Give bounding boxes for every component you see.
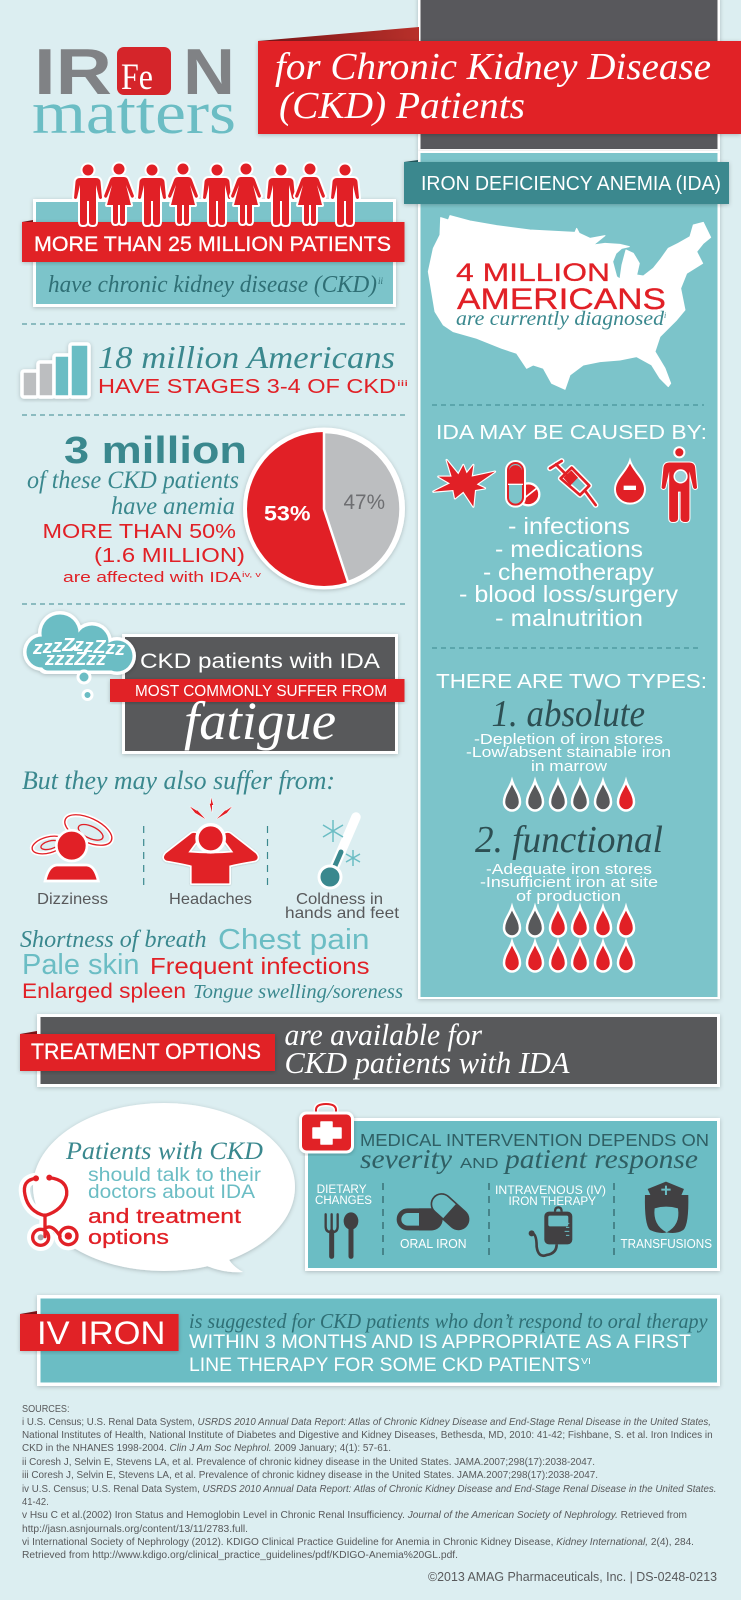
dashes: left divider 1	[22, 323, 405, 325]
panel: IV iron: LINE THERAPY FOR SOME CKD PATIENTS	[189, 1354, 580, 1376]
callout: speech bubble: doctors about IDA	[88, 1182, 255, 1203]
text: other symptoms: Shortness of breath	[20, 927, 206, 953]
heading: but they may also suffer from: But they may also suffer from:	[22, 766, 335, 795]
panel: dark top block	[418, 0, 720, 151]
text: sources: SOURCES:	[22, 1404, 70, 1415]
map: United States with 4 million Americans	[428, 216, 711, 389]
text: absolute type	[466, 693, 671, 775]
label: coldness: hands and feet	[285, 905, 400, 922]
panel: IV iron: WITHIN 3 MONTHS AND IS APPROPRIATE AS A FIRST	[189, 1331, 691, 1353]
panel: fatigue: fatigue	[184, 691, 336, 751]
banner: iron deficiency anemia heading	[404, 160, 729, 204]
heading: IDA may be caused by: IDA MAY BE CAUSED BY:	[436, 422, 707, 444]
text: functional type: 2. functional	[475, 819, 663, 861]
text: sources: National Institutes of Health, National Institute of Diabetes and Digestive and Kidney Diseases, Bethesda, MD, 2010: 41-42; Fishbane, S. et al. Iron Indices in	[22, 1430, 713, 1441]
icon: dizziness	[30, 808, 116, 881]
text: 3 million have anemia: of these CKD patients	[27, 467, 239, 494]
text: sources: http://jasn.asnjournals.org/content/13/11/2783.full.	[22, 1524, 248, 1535]
column: intravenous iron therapy: INTRAVENOUS (IV)	[495, 1183, 606, 1197]
map: United States with 4 million Americans: are currently diagnosed	[456, 308, 665, 330]
text: copyright: ©2013 AMAG Pharmaceuticals, Inc. | DS-0248-0213	[428, 1570, 717, 1584]
logo: Iron Fe Matters: matters	[32, 80, 236, 146]
title ribbon: (CKD) Patients	[279, 85, 525, 127]
icon: sleep cloud: zzzZzzZzz	[32, 635, 125, 659]
text: functional type	[475, 819, 663, 905]
chart: pie 53 percent and 47 percent: 53%	[264, 502, 311, 526]
text: absolute type: in marrow	[531, 758, 607, 775]
logo: Iron Fe Matters: N	[183, 35, 235, 108]
chart: pie 53 percent and 47 percent: 47%	[344, 491, 385, 514]
text: other symptoms: Chest pain	[218, 924, 370, 956]
callout: speech bubble	[33, 1103, 295, 1272]
dashes: left divider 3	[22, 603, 405, 605]
icon: pills	[506, 461, 539, 507]
text: other symptoms: Frequent infections	[150, 953, 370, 979]
text: sources: Retrieved from http://www.kdigo.org/clinical_practice_guidelines/pdf/KDIGO-Anemia%20GL.pdf.	[22, 1550, 458, 1561]
map: United States with 4 million Americans: AMERICANS	[457, 283, 666, 316]
title ribbon: for Chronic Kidney Disease	[275, 46, 711, 88]
panel: medical intervention: MEDICAL INTERVENTION DEPENDS ON	[360, 1130, 709, 1150]
column: intravenous iron therapy	[495, 1183, 606, 1256]
text: sources: CKD in the NHANES 1998-2004. Clin J Am Soc Nephrol. 2009 January; 4(1): 57-61.	[22, 1443, 391, 1454]
panel: treatment options	[20, 1014, 720, 1087]
callout: speech bubble: Patients with CKD	[65, 1138, 263, 1165]
label: headaches: Headaches	[169, 891, 252, 908]
map: United States with 4 million Americans: i	[664, 311, 666, 320]
icon: person with stomach	[662, 447, 697, 522]
label: coldness	[285, 891, 400, 922]
text: other symptoms: Enlarged spleen	[22, 980, 186, 1003]
logo: Iron Fe Matters: Fe	[121, 57, 153, 98]
dashes: causes divider	[432, 647, 699, 649]
text: sources: ii Coresh J, Selvin E, Stevens LA, et al. Prevalence of chronic kidney disease in the United States. JAMA.2007;298(17):2038-2047.	[22, 1457, 595, 1468]
map: United States with 4 million Americans: 4 MILLION	[456, 259, 610, 287]
text: other symptoms: Tongue swelling/soreness	[193, 981, 403, 1003]
text: 18 million Americans: HAVE STAGES 3-4 OF CKD	[98, 376, 396, 398]
panel: more than 25 million patients: ii	[378, 276, 384, 286]
panel: IV iron: VI	[581, 1357, 591, 1366]
banner: iron deficiency anemia heading: IRON DEFICIENCY ANEMIA (IDA)	[421, 173, 721, 195]
icon: cold thermometer	[319, 817, 360, 888]
icon: stethoscope	[24, 1175, 77, 1245]
text: 3 million have anemia: iv, v	[242, 572, 262, 579]
column: dietary changes	[315, 1184, 372, 1256]
logo: Iron Fe Matters: IR	[34, 35, 112, 108]
panel: treatment options: are available for	[284, 1017, 483, 1052]
text: sources: 41-42.	[22, 1497, 49, 1508]
panel: medical intervention	[305, 1118, 720, 1271]
list: causes of IDA: - malnutrition	[495, 605, 643, 631]
panel: iron deficiency anemia	[418, 151, 720, 999]
text: sources	[22, 1404, 716, 1561]
panel: treatment options: TREATMENT OPTIONS	[31, 1039, 261, 1064]
panel: IV iron: IV IRON	[37, 1315, 165, 1351]
icon: blood drop	[615, 461, 645, 504]
heading: two types: THERE ARE TWO TYPES:	[436, 671, 707, 693]
text: sources: v Hsu C et al.(2002) Iron Status and Hemoglobin Level in Chronic Renal Insufficiency. Journal of the American Society of Nephrology. Retrieved from	[22, 1510, 687, 1521]
icon: rising bar chart	[22, 344, 89, 397]
text: functional type: -Insufficient iron at site	[480, 874, 658, 891]
dashes: symptom divider 2	[266, 826, 268, 891]
icon: sleep cloud: zzzZzz	[44, 649, 106, 669]
text: 18 million Americans	[98, 339, 408, 398]
panel: more than 25 million patients: have chronic kidney disease (CKD)	[48, 272, 377, 298]
panel: more than 25 million patients	[22, 199, 404, 307]
text: functional type: of production	[516, 888, 621, 905]
column: dietary changes: CHANGES	[315, 1195, 372, 1207]
icons: causes of IDA	[433, 447, 697, 522]
column: transfusions	[620, 1182, 712, 1251]
text: sources: i U.S. Census; U.S. Renal Data System, USRDS 2010 Annual Data Report: Atlas of Chronic Kidney Disease and End-Stage Renal Disease in the United States,	[22, 1417, 711, 1428]
text: other symptoms: Pale skin	[22, 949, 140, 981]
callout: speech bubble: options	[88, 1227, 169, 1249]
icon: absolute iron drops	[504, 781, 634, 810]
panel: fatigue: CKD patients with IDA	[140, 650, 380, 673]
list: causes of IDA: - chemotherapy	[483, 559, 655, 585]
list: causes of IDA	[459, 513, 679, 631]
panel: treatment options: CKD patients with IDA	[284, 1045, 571, 1080]
icon: row of people	[74, 164, 359, 225]
dashes: left divider 2	[22, 414, 405, 416]
text: absolute type: -Depletion of iron stores	[474, 731, 663, 748]
text: absolute type: 1. absolute	[492, 693, 645, 735]
panel: medical intervention: patient response	[503, 1144, 698, 1174]
callout: speech bubble: and treatment	[88, 1206, 242, 1228]
panel: fatigue	[110, 634, 404, 754]
title ribbon	[258, 27, 741, 134]
text: sources: vi International Society of Nephrology (2012). KDIGO Clinical Practice Guideline for Anemia in Chronic Kidney Disease, Kidney International, 2(4), 284.	[22, 1537, 694, 1548]
panel: medical intervention: AND	[460, 1155, 499, 1172]
column: intravenous iron therapy: IRON THERAPY	[508, 1194, 596, 1208]
text: sources: iv U.S. Census; U.S. Renal Data System, USRDS 2010 Annual Data Report: Atlas of Chronic Kidney Disease and End-Stage Renal Disease in the United States.	[22, 1484, 716, 1495]
column: oral iron	[399, 1191, 472, 1251]
text: 3 million have anemia: have anemia	[111, 493, 235, 520]
text: sources: iii Coresh J, Selvin E, Stevens LA, et al. Prevalence of chronic kidney disease in the United States. JAMA.2007;298(17):2038-2047.	[22, 1470, 598, 1481]
text: 3 million have anemia: are affected with IDA	[63, 569, 241, 586]
dashes: map divider	[432, 404, 704, 406]
text: absolute type: -Low/absent stainable iron	[466, 744, 671, 761]
text: 18 million Americans: iii	[397, 379, 408, 388]
column: dietary changes: DIETARY	[317, 1184, 367, 1196]
column: transfusions: TRANSFUSIONS	[620, 1237, 712, 1251]
panel: IV iron	[20, 1295, 720, 1386]
chart: pie 53 percent and 47 percent	[243, 428, 405, 590]
panel: fatigue: MOST COMMONLY SUFFER FROM	[135, 683, 387, 700]
list: causes of IDA: - medications	[495, 536, 643, 562]
icon: functional iron drops	[504, 907, 634, 972]
icon: sleep cloud	[23, 611, 136, 700]
text: 18 million Americans: 18 million Americans	[98, 339, 395, 375]
list: causes of IDA: - infections	[508, 513, 630, 539]
text: functional type: -Adequate iron stores	[486, 861, 652, 878]
text: 3 million have anemia	[27, 430, 262, 586]
icon: syringe	[550, 461, 596, 505]
callout: speech bubble: should talk to their	[88, 1165, 262, 1186]
icon: headache	[164, 798, 258, 883]
list: causes of IDA: - blood loss/surgery	[459, 581, 679, 607]
label: dizziness: Dizziness	[37, 891, 108, 908]
text: other symptoms	[20, 924, 403, 1003]
dashes: symptom divider 1	[143, 826, 145, 891]
text: 3 million have anemia: 3 million	[64, 430, 247, 472]
text: 3 million have anemia: MORE THAN 50%	[42, 521, 236, 543]
icon: first aid kit	[300, 1104, 352, 1152]
text: 3 million have anemia: (1.6 MILLION)	[94, 545, 245, 567]
column: oral iron: ORAL IRON	[400, 1237, 466, 1251]
panel: more than 25 million patients: MORE THAN 25 MILLION PATIENTS	[34, 233, 391, 256]
panel: medical intervention: severity	[360, 1144, 452, 1174]
icon: infection burst	[433, 460, 495, 507]
panel: IV iron: is suggested for CKD patients who don’t respond to oral therapy	[189, 1309, 708, 1333]
logo: Iron Fe Matters	[32, 35, 236, 146]
label: coldness: Coldness in	[296, 891, 383, 908]
